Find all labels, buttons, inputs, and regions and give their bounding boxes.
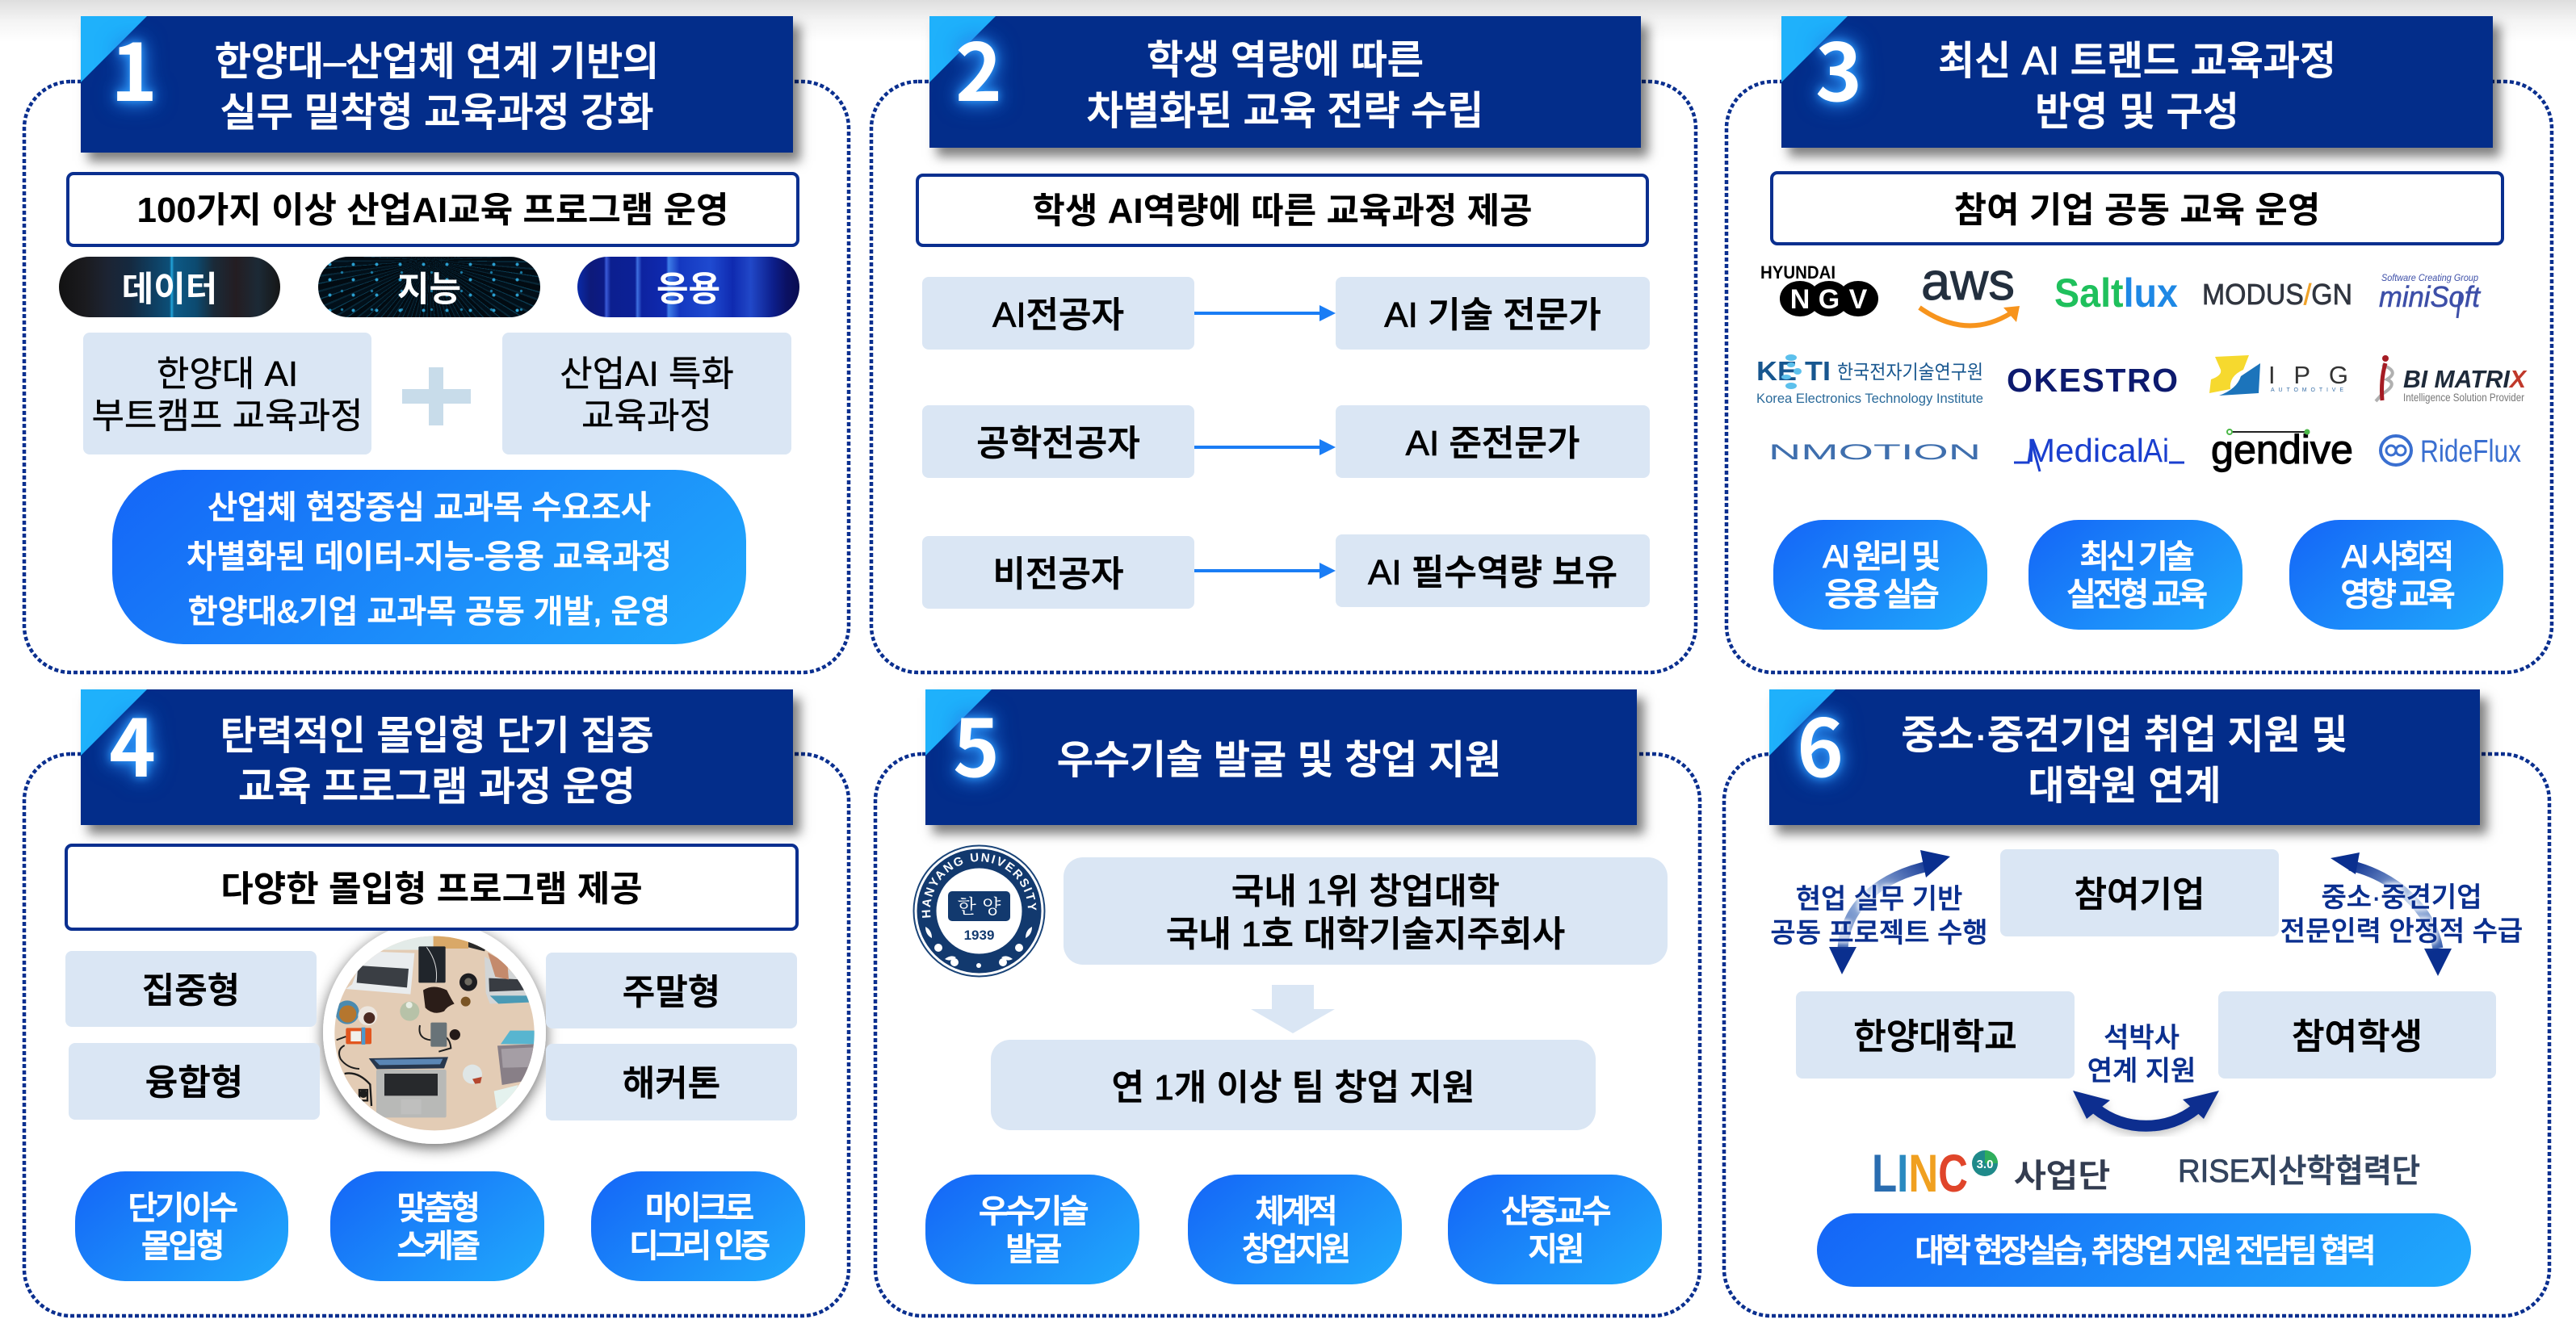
logo: Hyundai NGV: N (1790, 284, 1810, 315)
box: AI expert (1336, 277, 1650, 350)
arrows: cycle (1829, 850, 2452, 1137)
partner logos (1756, 251, 2528, 473)
logo: RideFlux (2381, 434, 2521, 469)
pill: micro degree: 마이크로 (645, 1191, 751, 1226)
arrow: bottom double (2073, 1091, 2219, 1126)
heading 6: 6 (1797, 685, 1844, 800)
box: engineering major: 공학전공자 (976, 424, 1140, 463)
box: no.1 startup university (1064, 857, 1668, 965)
box: bootcamp: 한양대 AI (157, 354, 298, 394)
box: convergence (69, 1043, 320, 1120)
pill: AI principles: AI 원리 및 (1823, 539, 1938, 575)
box: AI semi expert (1336, 405, 1650, 478)
pill: industry professor (1448, 1175, 1662, 1284)
logo: LINC 3.0: 3.0 (1977, 1158, 1993, 1171)
heading 6 (1769, 689, 2480, 825)
heading 5 (925, 689, 1637, 825)
box: participating company: 참여기업 (2075, 875, 2205, 915)
panel 4: immersive programs (23, 685, 851, 1317)
arrow: left double (1829, 850, 1950, 974)
box: weekend: 주말형 (623, 973, 720, 1012)
subheading 2: 학생 AI역량에 따른 교육과정 제공 (1032, 191, 1533, 231)
logo: RISE: RISE지산학협력단 (2178, 1154, 2420, 1189)
heading 3 (1781, 16, 2493, 148)
pill: short credit (75, 1171, 288, 1281)
heading 4: 4 (109, 685, 156, 800)
logo: KETI: KE TI (1756, 356, 1831, 386)
logo: KETI: 한국전자기술연구원 (1837, 362, 1983, 383)
label: graduate link: 석박사 (2104, 1023, 2180, 1053)
subheading 4 (65, 844, 799, 931)
heading 3: 3 (1815, 10, 1862, 124)
label: workforce supply: 전문인력 안정적 수급 (2280, 916, 2523, 947)
logo: miniSoft: Software Creating Group (2381, 272, 2478, 283)
box: AI semi expert: AI 준전문가 (1406, 424, 1580, 463)
arrow: engineering major (1194, 439, 1336, 455)
label: workforce supply: 중소·중견기업 (2321, 882, 2482, 913)
logo: BI Matrix: BI MATRIX (2403, 365, 2528, 393)
pill: industry professor: 지원 (1528, 1232, 1582, 1267)
logo: Hyundai NGV (1760, 262, 1878, 316)
logo: Modusign: MODUS/GN (2202, 278, 2352, 311)
box: intensive (65, 951, 317, 1027)
pill: custom schedule: 스케줄 (397, 1229, 477, 1264)
box: hackathon: 해커톤 (623, 1064, 720, 1104)
label: graduate link: 연계 지원 (2087, 1056, 2196, 1087)
pill: intelligence: 지능 (397, 270, 461, 309)
heading 6: 중소·중견기업 취업 지원 및 (1901, 714, 2348, 757)
pill: intelligence (318, 257, 540, 317)
heading 1: 1 (111, 10, 157, 124)
box: AI essential skills: AI 필수역량 보유 (1368, 553, 1617, 593)
box: hackathon (546, 1044, 797, 1120)
box: convergence: 융합형 (145, 1063, 243, 1103)
logo: MedicalAi: Ai (2143, 432, 2169, 469)
logo: IPG Automotive: IPG (2268, 361, 2348, 389)
box: AI major: AI전공자 (992, 295, 1124, 335)
pill: data: 데이터 (122, 270, 217, 309)
subheading 3: 참여 기업 공동 교육 운영 (1954, 191, 2320, 230)
subheading 1: 100가지 이상 산업AI교육 프로그램 운영 (136, 191, 729, 230)
logo: BI Matrix: Intelligence Solution Provider (2403, 391, 2524, 404)
heading 1: 실무 밀착형 교육과정 강화 (220, 91, 653, 135)
panel 6: employment and graduate school (1722, 685, 2552, 1317)
pill: latest tech: 실전형 교육 (2066, 577, 2205, 613)
callout: industry demand: 산업체 현장중심 교과목 수요조사 (208, 490, 651, 526)
pill: AI social: 영향 교육 (2340, 577, 2452, 613)
box: industry AI: 교육과정 (581, 396, 712, 436)
heading 1: 한양대–산업체 연계 기반의 (215, 40, 659, 84)
pill: tech discovery: 발굴 (1005, 1232, 1059, 1267)
logo: NMotion: NMOTION (1768, 440, 1981, 464)
pill: dedicated team: 대학 현장실습, 취창업 지원 전담팀 협력 (1915, 1234, 2373, 1269)
pill: latest tech: 최신 기술 (2079, 539, 2192, 575)
heading 5: 5 (953, 685, 1000, 800)
subheading 1 (66, 172, 799, 247)
logo: MedicalAi: Medical (2027, 432, 2144, 469)
box: AI expert: AI 기술 전문가 (1384, 295, 1601, 335)
pill: AI social: AI 사회적 (2342, 539, 2451, 575)
callout: industry demand: 한양대&기업 교과목 공동 개발, 운영 (188, 594, 670, 630)
box: participating students (2218, 991, 2496, 1079)
heading 2 (929, 16, 1641, 148)
logo: AWS: aws (1921, 251, 2015, 311)
pill: AI principles: 응용 실습 (1824, 577, 1936, 613)
logo: LINC 3.0 (1872, 1143, 2110, 1203)
arrow: AI major (1194, 305, 1336, 321)
box: industry AI: 산업AI 특화 (560, 354, 734, 394)
logo: IPG Automotive (2209, 355, 2348, 396)
logo: Hyundai NGV: G (1819, 284, 1840, 315)
box: participating students: 참여학생 (2292, 1017, 2423, 1057)
box: no.1 startup university: 국내 1호 대학기술지주회사 (1166, 915, 1565, 954)
emblem: Hanyang University seal (913, 844, 1045, 977)
heading 2: 학생 역량에 따른 (1147, 39, 1424, 82)
heading 4: 교육 프로그램 과정 운영 (238, 765, 636, 809)
logo: miniSoft: miniSoft (2379, 280, 2482, 313)
arrow: non major (1194, 563, 1336, 579)
pill: AI principles (1773, 520, 1987, 630)
box: team startup support: 연 1개 이상 팀 창업 지원 (1112, 1068, 1475, 1108)
heading 6: 대학원 연계 (2028, 764, 2221, 808)
icon: plus (402, 367, 471, 425)
logo: LINC 3.0: 사업단 (2014, 1158, 2110, 1194)
label: joint project: 공동 프로젝트 수행 (1770, 918, 1988, 949)
heading 1 (81, 16, 793, 153)
box: Hanyang University: 한양대학교 (1853, 1017, 2017, 1057)
pill: latest tech (2028, 520, 2242, 630)
subheading 2 (916, 174, 1649, 247)
logo: Okestro: OKESTRO (2007, 362, 2178, 399)
logo: IPG Automotive: AUTOMOTIVE (2271, 387, 2343, 393)
box: participating company (2000, 849, 2279, 936)
panel 3: latest AI trends (1725, 10, 2553, 675)
heading 3: 반영 및 구성 (2035, 90, 2239, 134)
box: Hanyang University (1796, 991, 2075, 1079)
label: graduate link (2087, 1023, 2196, 1087)
panel 1: industry linked curriculum (23, 10, 851, 675)
logo: KETI: Korea Electronics Technology Institute (1756, 391, 1983, 406)
photo: laptops on desk (313, 931, 556, 1158)
label: workforce supply (2280, 879, 2523, 949)
box: non major: 비전공자 (993, 555, 1123, 594)
pill: systematic startup: 체계적 (1255, 1194, 1335, 1229)
box: AI essential skills (1336, 534, 1650, 607)
emblem: Hanyang University seal: 1939 (964, 928, 994, 943)
logo: gendive: gendive (2211, 427, 2353, 472)
box: non major (922, 536, 1194, 609)
pill: application (577, 257, 799, 317)
pill: industry professor: 산중교수 (1501, 1194, 1609, 1229)
subheading 3 (1770, 171, 2504, 245)
pill: systematic startup: 창업지원 (1242, 1232, 1348, 1267)
pill: tech discovery (925, 1175, 1139, 1284)
logo: KETI (1756, 354, 1983, 406)
heading 2: 2 (955, 10, 1002, 124)
panel 5: startup support (874, 685, 1702, 1317)
subheading 4: 다양한 몰입형 프로그램 제공 (220, 869, 643, 909)
pill: AI social (2289, 520, 2503, 630)
pill: custom schedule: 맞춤형 (397, 1191, 477, 1226)
box: weekend (546, 953, 797, 1028)
logo: Saltlux: Saltlux (2054, 270, 2178, 316)
pill: short credit: 몰입형 (141, 1229, 222, 1264)
heading 3: 최신 AI 트랜드 교육과정 (1938, 39, 2336, 82)
box: no.1 startup university: 국내 1위 창업대학 (1231, 872, 1500, 911)
pill: short credit: 단기이수 (128, 1191, 236, 1226)
emblem: Hanyang University seal: 한 양 (958, 890, 1001, 919)
callout: industry demand (112, 470, 746, 644)
pill: micro degree: 디그리 인증 (629, 1229, 767, 1264)
emblem: Hanyang University seal: HANYANG UNIVERSITY (922, 852, 1037, 918)
logo: MedicalAi (2014, 432, 2184, 471)
arrow: right double (2331, 852, 2452, 976)
box: intensive: 집중형 (142, 971, 240, 1011)
box: team startup support (991, 1040, 1596, 1130)
heading 2: 차별화된 교육 전략 수립 (1087, 89, 1483, 132)
box: bootcamp (83, 333, 371, 454)
pill: micro degree (591, 1171, 805, 1281)
box: engineering major (922, 405, 1194, 478)
panel 2: strategy by competency (869, 10, 1697, 675)
logo: Hyundai NGV: V (1849, 284, 1868, 315)
pill: tech discovery: 우수기술 (979, 1194, 1086, 1229)
box: bootcamp: 부트캠프 교육과정 (91, 396, 363, 436)
box: AI major (922, 277, 1194, 350)
box: industry AI (502, 333, 791, 454)
callout: industry demand: 차별화된 데이터-지능-응용 교육과정 (187, 539, 672, 575)
logo: LINC 3.0: LINC (1872, 1143, 1968, 1203)
logo: Hyundai NGV: HYUNDAI (1760, 262, 1836, 283)
pill: application: 응용 (657, 270, 720, 309)
logo: BI Matrix (2376, 355, 2528, 404)
label: joint project: 현업 실무 기반 (1796, 884, 1962, 915)
heading 5: 우수기술 발굴 및 창업 지원 (1057, 738, 1501, 781)
label: joint project (1770, 881, 1988, 949)
heading 4: 탄력적인 몰입형 단기 집중 (220, 714, 653, 757)
pill: dedicated team (1817, 1213, 2471, 1287)
pill: systematic startup (1188, 1175, 1402, 1284)
pill: data (59, 257, 280, 317)
heading 4 (81, 689, 793, 825)
logo: RideFlux: RideFlux (2420, 434, 2521, 469)
arrow: down (1251, 985, 1335, 1033)
pill: custom schedule (330, 1171, 544, 1281)
